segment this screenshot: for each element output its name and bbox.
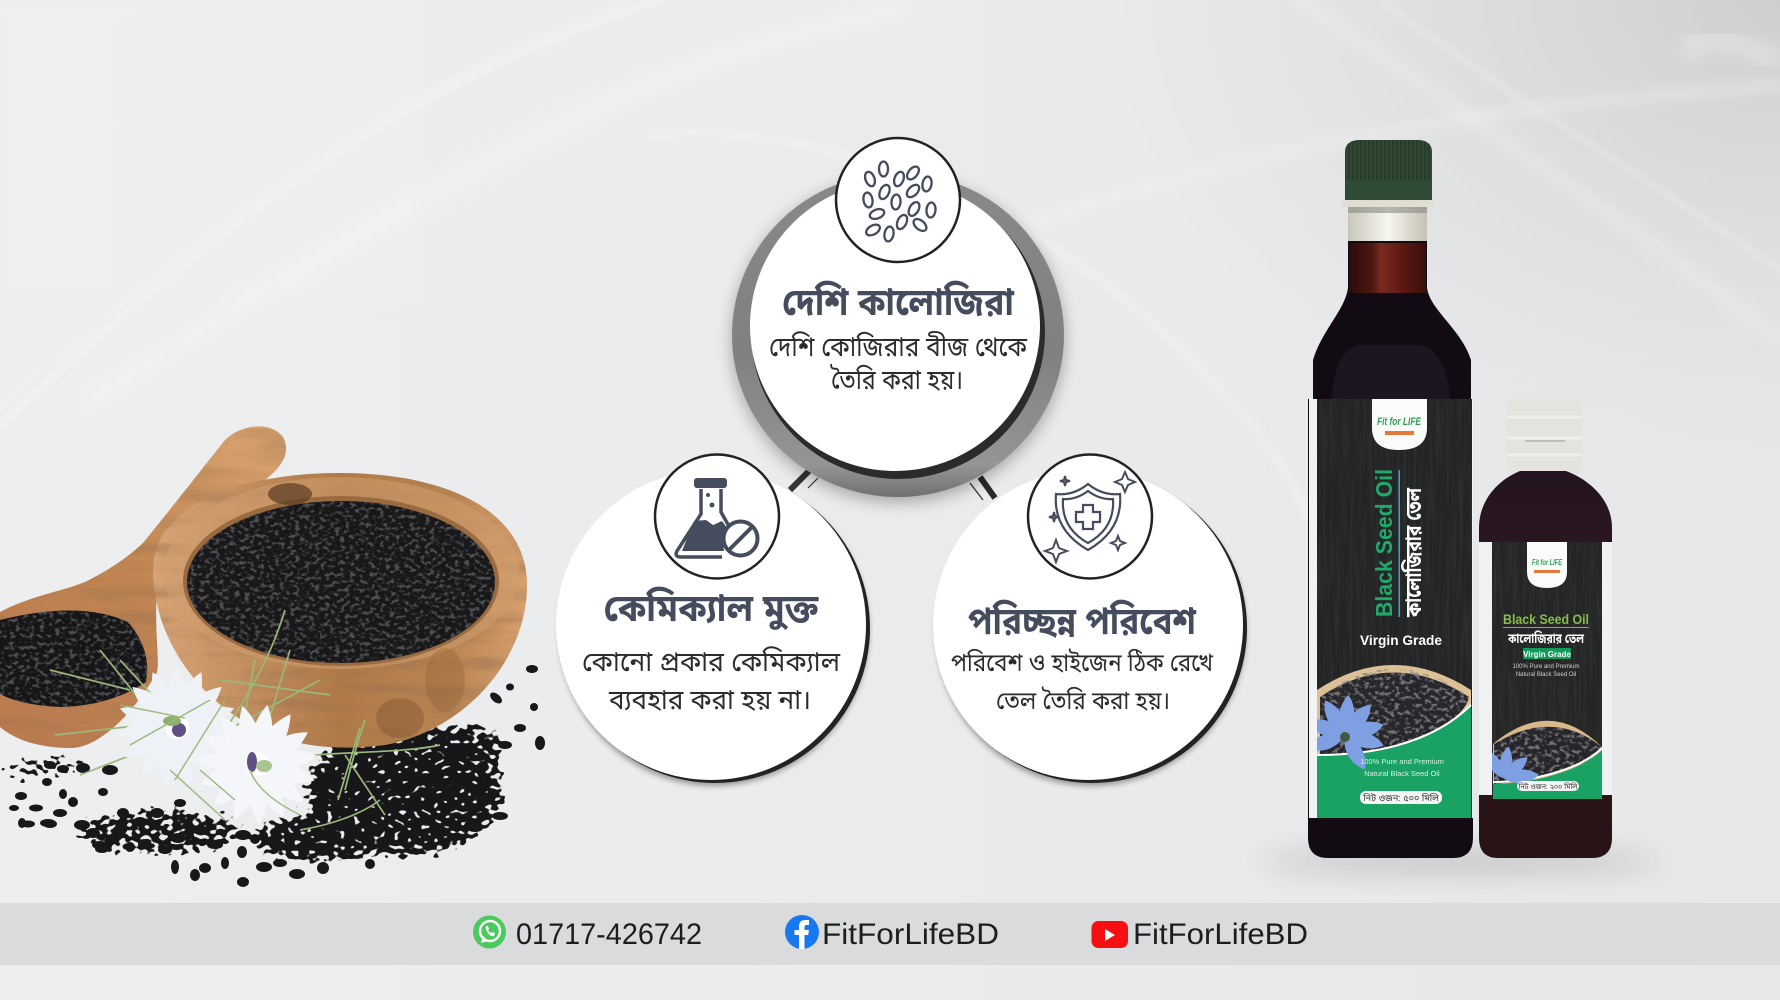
green stems over flowers — [120, 700, 300, 820]
spoon bowl and handle — [0, 420, 300, 755]
description: কোনো প্রকার কেমিক্যাল — [582, 646, 840, 677]
icon: facebook — [785, 915, 819, 949]
description: তৈরি করা হয়। — [830, 364, 963, 395]
flowers — [116, 667, 318, 824]
description — [769, 331, 1028, 395]
icon: seeds — [836, 138, 960, 262]
scattered seeds — [0, 665, 545, 887]
heading: দেশি কালোজিরা — [782, 280, 1015, 324]
description — [582, 646, 840, 715]
youtube name: FitForLifeBD — [1133, 918, 1308, 951]
big logo tab: Fit for LIFE — [1377, 416, 1422, 428]
heading: কেমিক্যাল মুক্ত — [604, 586, 819, 631]
small bottle cap — [1507, 399, 1582, 475]
vertical product name: Black Seed Oil — [1371, 469, 1397, 617]
icon: flask no chemical — [655, 454, 779, 578]
virgin grade: Virgin Grade — [1360, 632, 1442, 648]
description: ব্যবহার করা হয় না। — [608, 685, 811, 715]
panel: right circle — [933, 454, 1247, 786]
purity note: 100% Pure and Premium — [1360, 757, 1444, 766]
small bottle — [1479, 399, 1612, 858]
small bottle logo tab: Fit for LIFE — [1532, 558, 1562, 567]
big label — [1305, 399, 1473, 818]
cap — [1341, 140, 1434, 207]
flower one — [116, 667, 238, 788]
vertical bengali name: কালোজিরার তেল — [1401, 488, 1426, 618]
small label bengali: কালোজিরার তেল — [1507, 631, 1584, 646]
big logo tab — [1372, 399, 1427, 450]
heading: পরিচ্ছন্ন পরিবেশ — [968, 599, 1197, 643]
icon: youtube — [1092, 921, 1128, 948]
small label weight: নিট ওজন: ২০০ মিলি — [1518, 783, 1578, 791]
small bottle body — [1479, 471, 1612, 858]
bottle shadow — [1260, 854, 1660, 870]
small label note: Natural Black Seed Oil — [1516, 672, 1576, 678]
icon: whatsapp — [473, 916, 506, 948]
description — [951, 648, 1213, 715]
connector arc right — [970, 477, 995, 500]
oil — [1308, 241, 1473, 858]
small label note — [1512, 664, 1580, 678]
small label weight — [1517, 781, 1579, 791]
flower two — [196, 703, 318, 824]
small label note: 100% Pure and Premium — [1512, 664, 1580, 670]
small bottle label — [1479, 542, 1612, 799]
small label title: Black Seed Oil — [1503, 611, 1589, 627]
connector arc left — [790, 470, 818, 490]
panel: left circle — [556, 454, 870, 786]
purity note: Natural Black Seed Oil — [1364, 769, 1440, 778]
weight pill: নিট ওজন: ৫০০ মিলি — [1362, 792, 1439, 803]
bowls of black seeds — [0, 420, 545, 887]
icon: shield — [1028, 454, 1152, 578]
large bottle — [1305, 140, 1473, 858]
glass neck — [1348, 207, 1427, 243]
facebook name: FitForLifeBD — [822, 918, 999, 951]
purity note — [1360, 757, 1444, 778]
small label pill: Virgin Grade — [1523, 650, 1571, 659]
whatsapp number: 01717-426742 — [516, 918, 702, 951]
bottom contact bar — [0, 903, 1780, 965]
large wooden bowl — [150, 470, 530, 755]
description: পরিবেশ ও হাইজেন ঠিক রেখে — [951, 648, 1213, 677]
panel: top circle — [732, 138, 1064, 502]
small bottle logo tab — [1527, 542, 1567, 588]
green stems behind flowers — [50, 610, 440, 830]
description: দেশি কোজিরার বীজ থেকে — [769, 331, 1028, 362]
description: তেল তৈরি করা হয়। — [996, 686, 1170, 715]
